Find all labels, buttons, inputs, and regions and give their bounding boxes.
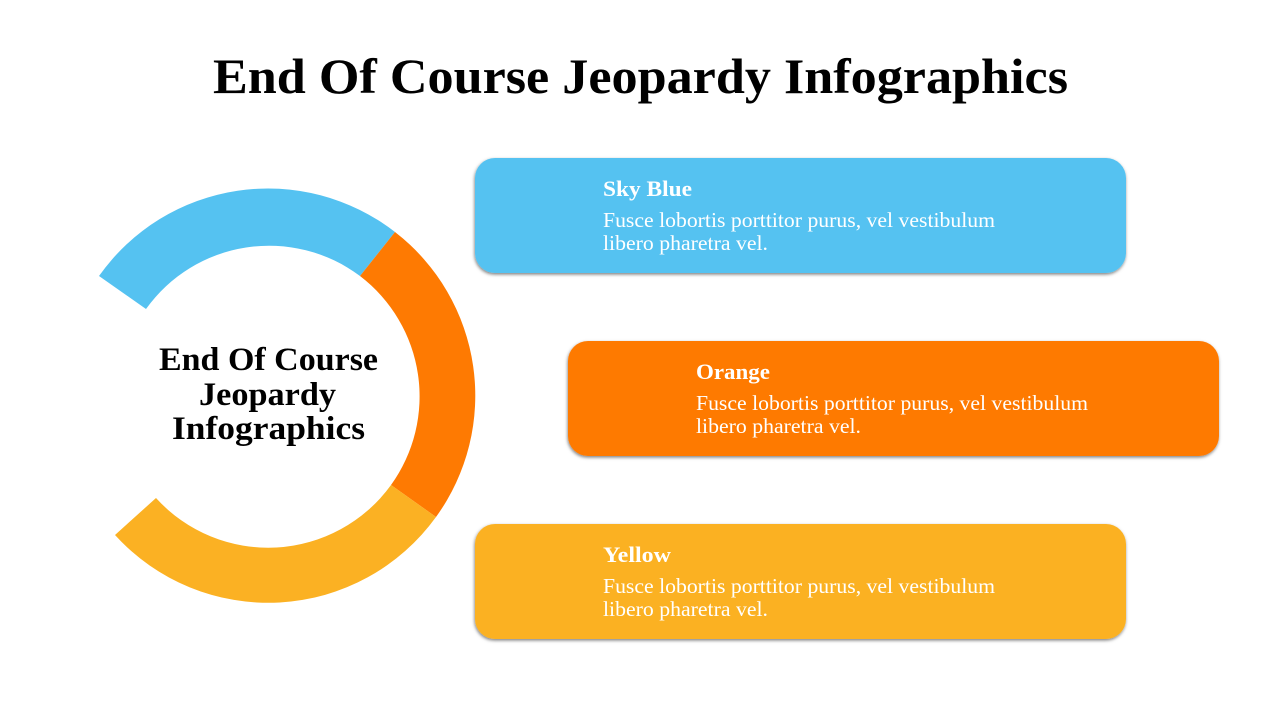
title: End Of Course Jeopardy Infographics bbox=[213, 48, 1068, 104]
body text: Fusce lobortis porttitor purus, vel vestibulum bbox=[603, 574, 995, 598]
body text: libero pharetra vel. bbox=[603, 597, 768, 621]
heading: yellow: Yellow bbox=[603, 542, 671, 567]
donut centre label: Infographics bbox=[172, 411, 365, 447]
body text bbox=[603, 574, 995, 621]
donut centre label: End Of Course bbox=[159, 342, 378, 378]
donut segment: orange bbox=[360, 232, 475, 517]
body text bbox=[603, 208, 995, 255]
panel: yellow bbox=[475, 524, 1126, 639]
heading: orange: Orange bbox=[696, 359, 770, 384]
body text: Fusce lobortis porttitor purus, vel vestibulum bbox=[603, 208, 995, 232]
body text: libero pharetra vel. bbox=[696, 414, 861, 438]
card background bbox=[475, 158, 1126, 273]
body text: Fusce lobortis porttitor purus, vel vestibulum bbox=[696, 391, 1088, 415]
body text: libero pharetra vel. bbox=[603, 231, 768, 255]
donut centre label: Jeopardy bbox=[199, 377, 337, 413]
body text bbox=[696, 391, 1088, 438]
card background bbox=[475, 524, 1126, 639]
donut segment: yellow bbox=[115, 485, 436, 603]
card background bbox=[568, 341, 1219, 456]
heading: sky blue: Sky Blue bbox=[603, 176, 692, 201]
donut segment: sky blue bbox=[99, 188, 395, 309]
donut chart bbox=[99, 188, 475, 603]
panel: sky blue bbox=[475, 158, 1126, 273]
panel: orange bbox=[568, 341, 1219, 456]
donut centre label bbox=[159, 342, 378, 447]
